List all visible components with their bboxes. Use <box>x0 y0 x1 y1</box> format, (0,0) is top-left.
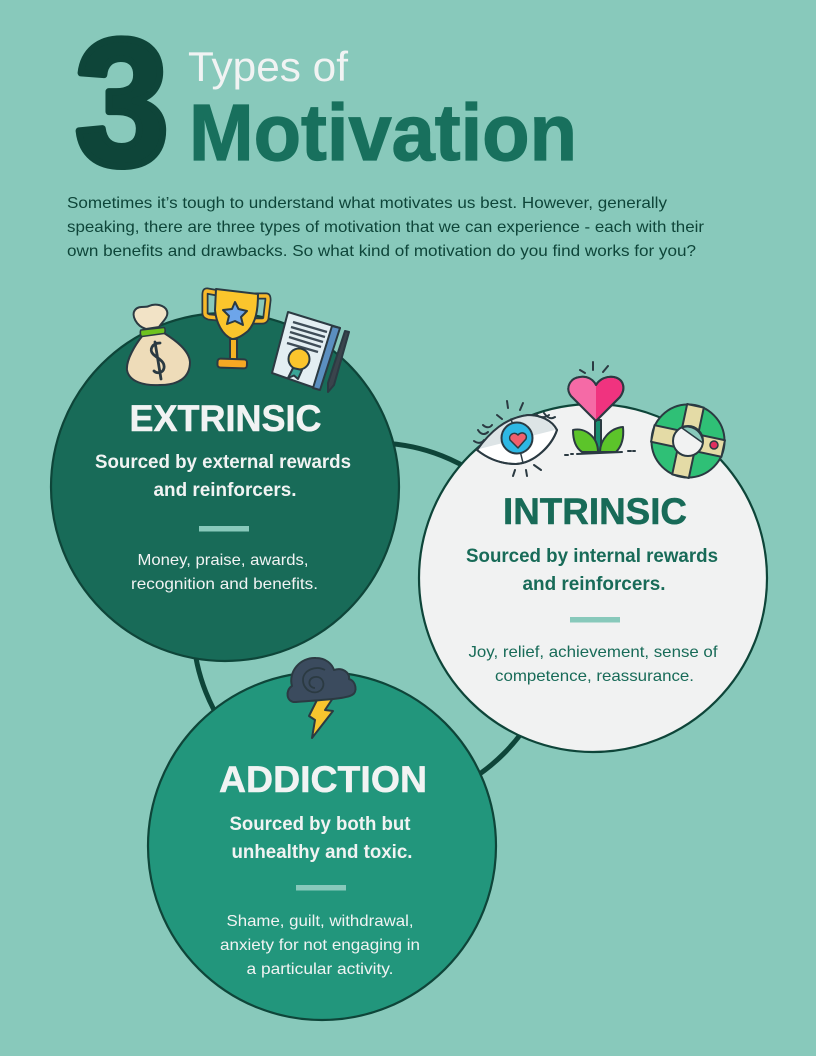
addiction subheading <box>230 814 412 863</box>
extrinsic heading: EXTRINSIC <box>130 398 322 439</box>
intro paragraph: speaking, there are three types of motivation that we can experience - each with their <box>67 219 705 236</box>
extrinsic subheading: Sourced by external rewards <box>95 452 351 473</box>
panel: intrinsic <box>419 404 767 752</box>
addiction description: Shame, guilt, withdrawal, <box>226 913 414 930</box>
addiction subheading: unhealthy and toxic. <box>232 842 412 863</box>
intrinsic subheading <box>466 546 718 595</box>
panel: extrinsic <box>51 313 399 661</box>
title line: Motivation: Motivation <box>189 88 577 177</box>
icon: life ring <box>645 398 731 484</box>
addiction description: anxiety for not engaging in <box>220 937 420 954</box>
icon: certificate and pen <box>272 312 349 392</box>
intrinsic description <box>468 644 718 685</box>
addiction divider <box>296 885 346 890</box>
intrinsic subheading: Sourced by internal rewards <box>466 546 718 567</box>
intrinsic circle <box>419 404 767 752</box>
intro paragraph: own benefits and drawbacks. So what kind of motivation do you find works for you? <box>67 243 696 260</box>
addiction circle <box>148 672 496 1020</box>
icon: money bag <box>127 305 190 385</box>
icon: eye <box>474 401 557 476</box>
icon: trophy <box>205 289 268 369</box>
intrinsic description: Joy, relief, achievement, sense of <box>468 644 718 661</box>
intrinsic subheading: and reinforcers. <box>522 574 666 595</box>
intrinsic description: competence, reassurance. <box>495 668 694 685</box>
extrinsic circle <box>51 313 399 661</box>
extrinsic description <box>131 552 318 593</box>
extrinsic description: recognition and benefits. <box>131 576 318 593</box>
intro paragraph <box>67 195 705 260</box>
extrinsic divider <box>199 526 249 532</box>
addiction description <box>220 913 420 978</box>
title numeral 3: 3 <box>75 2 169 204</box>
intrinsic heading: INTRINSIC <box>503 491 687 532</box>
panel: addiction <box>148 672 496 1020</box>
addiction subheading: Sourced by both but <box>230 814 411 835</box>
extrinsic description: Money, praise, awards, <box>138 552 308 569</box>
icon: storm cloud <box>287 658 356 738</box>
title line: Types of: Types of <box>188 43 348 90</box>
intro paragraph: Sometimes it’s tough to understand what motivates us best. However, generally <box>67 195 667 212</box>
extrinsic subheading <box>95 452 351 501</box>
connecting ring <box>193 443 557 807</box>
addiction heading: ADDICTION <box>219 759 427 800</box>
intrinsic divider <box>570 617 620 622</box>
addiction description: a particular activity. <box>246 961 394 978</box>
title <box>75 2 577 204</box>
icon: heart flower <box>565 362 635 455</box>
extrinsic subheading: and reinforcers. <box>154 480 296 501</box>
